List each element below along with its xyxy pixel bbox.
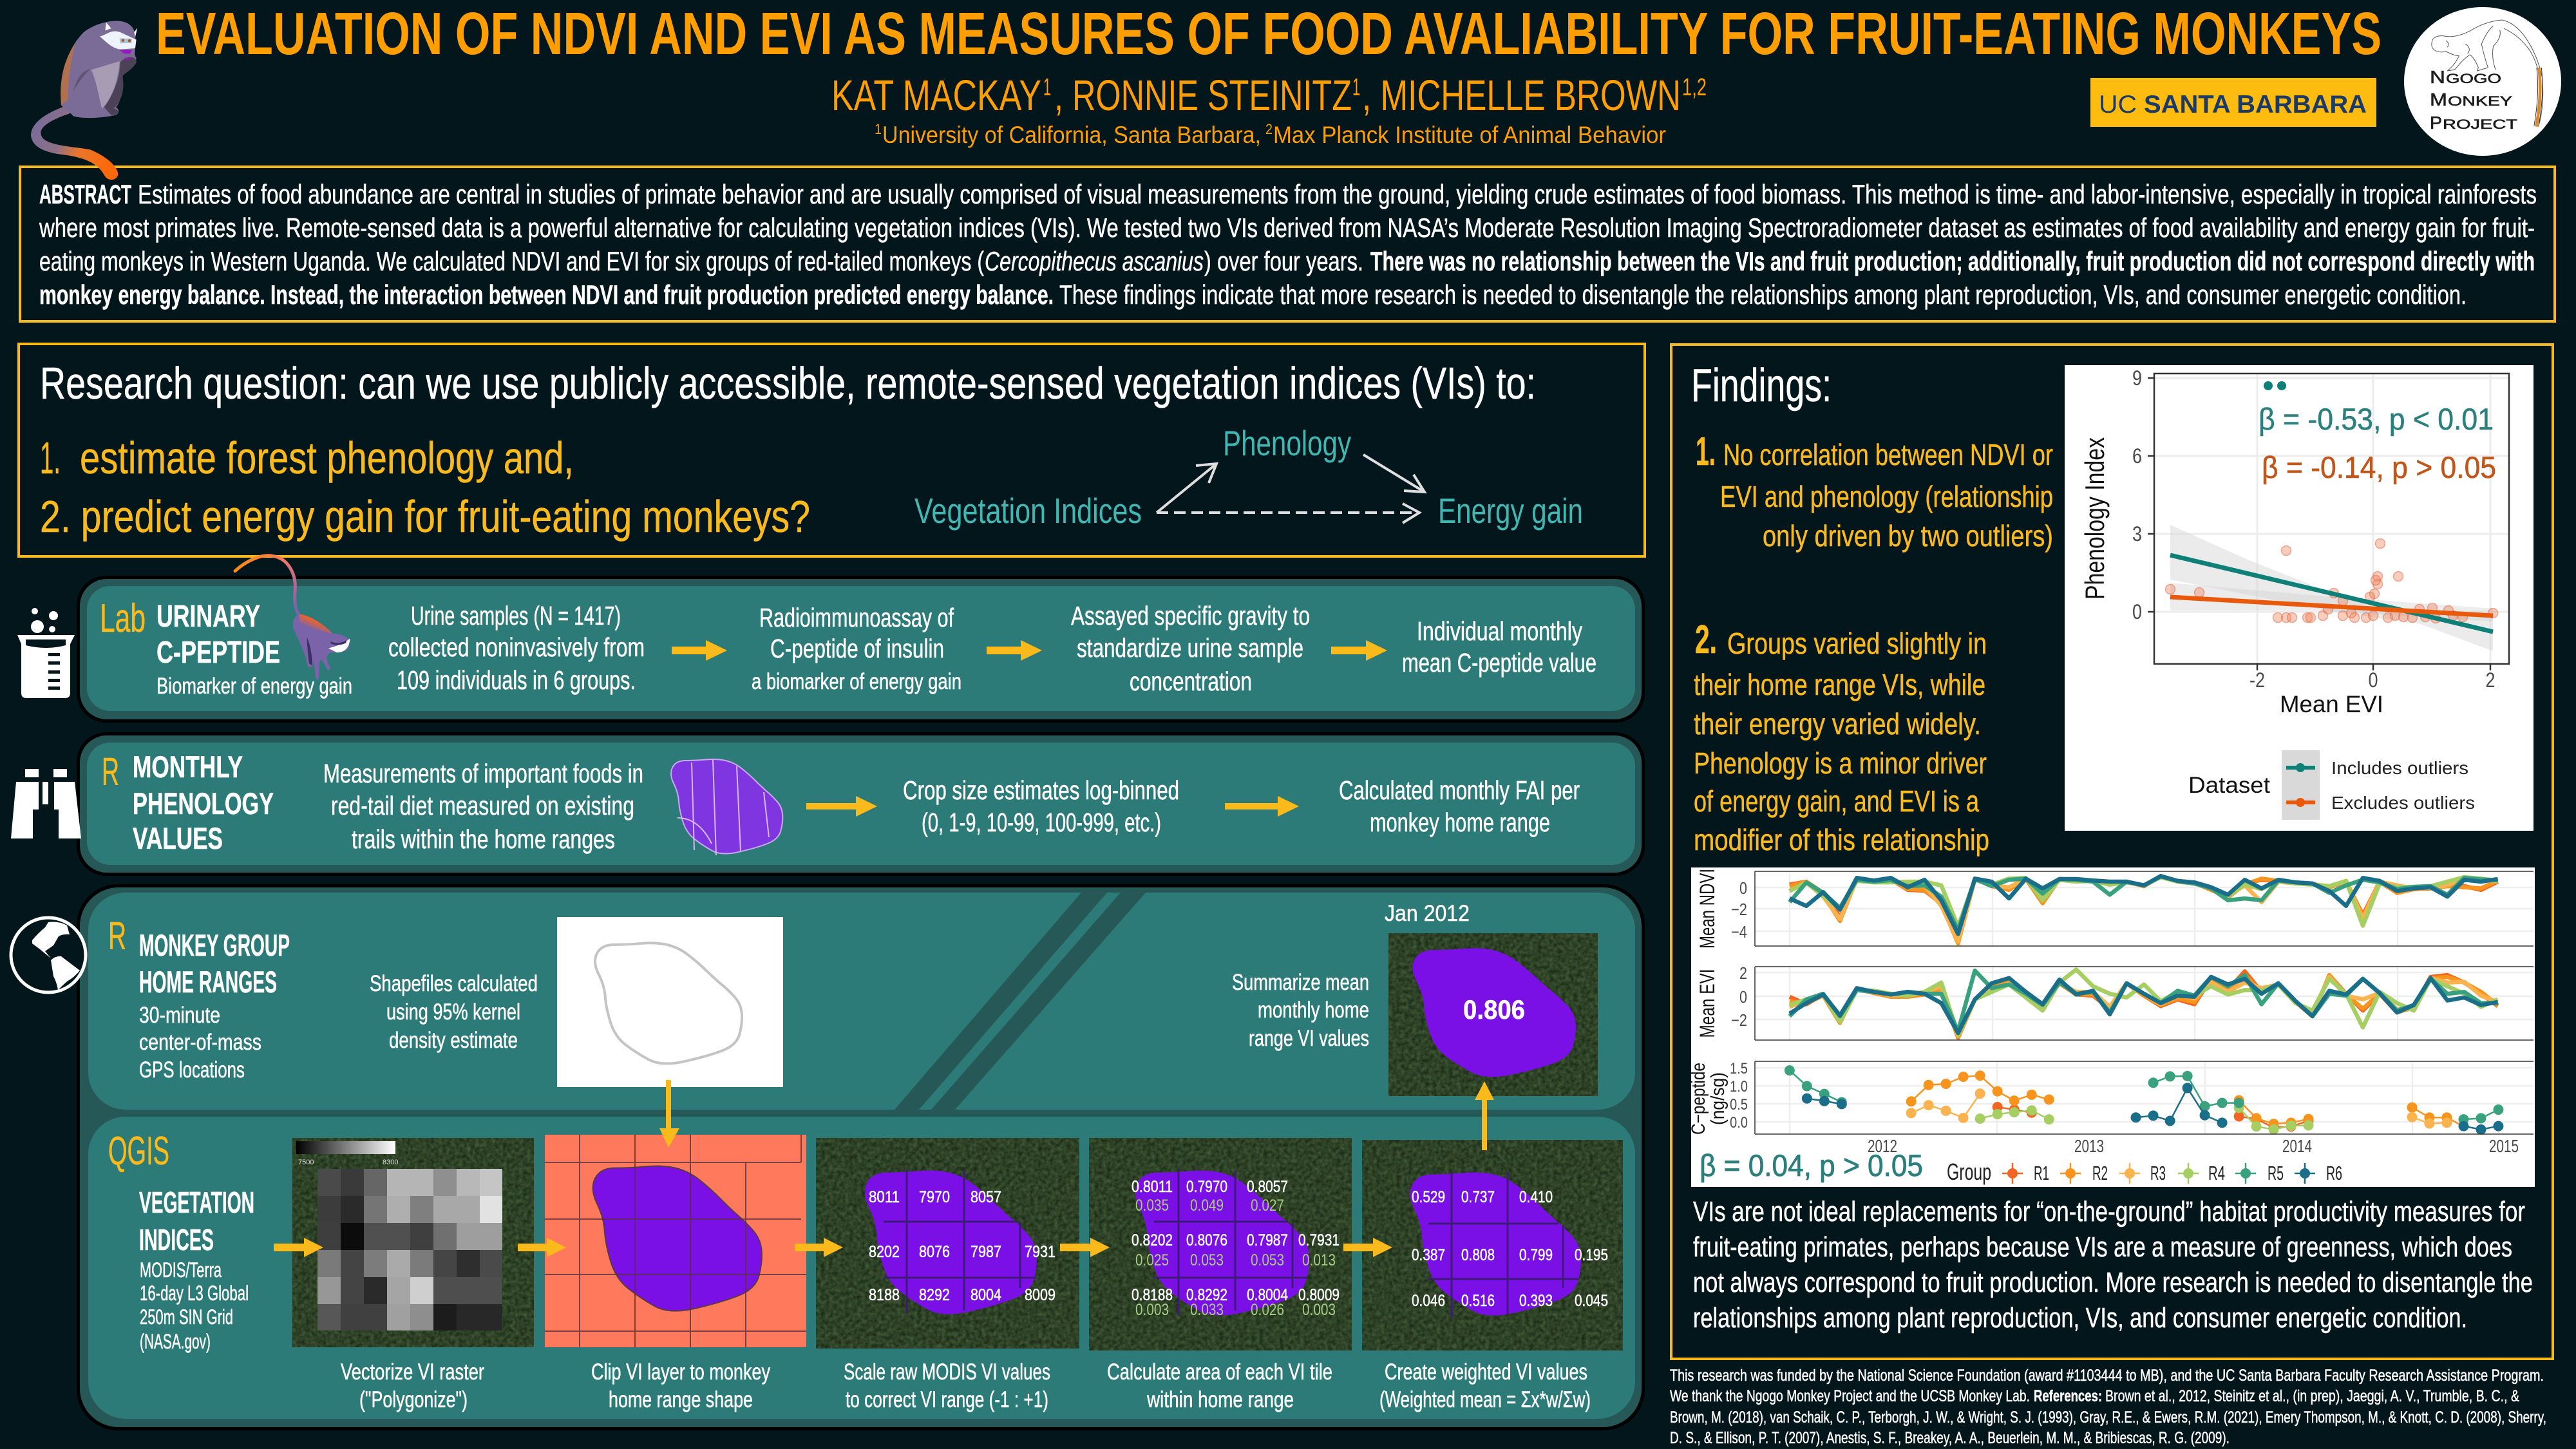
research aims: 1. [40, 433, 61, 483]
map: VI raster [292, 1138, 534, 1347]
map: tile areas: 0.027 [1251, 1197, 1284, 1215]
funding and references: References: [2034, 1387, 2102, 1405]
plot: C-peptide: 2013 [2074, 1136, 2104, 1156]
chart: phenology vs EVI scatter: Mean EVI [2280, 691, 2383, 717]
step: crop size [903, 775, 1179, 837]
heading: urinary C-peptide: Biomarker of energy gain [156, 674, 352, 699]
step: crop size: (0, 1-9, 10-99, 100-999, etc.) [922, 808, 1161, 837]
causal diagram [914, 423, 1583, 531]
logo: Ngogo Monkey Project [2404, 7, 2561, 156]
step: FAI [1339, 775, 1580, 837]
logo: Ngogo Monkey Project: N [2430, 67, 2445, 87]
map: tile areas: 0.8076 [1186, 1231, 1227, 1249]
logo: UC Santa Barbara: UC [2099, 91, 2137, 118]
map: trails in home range [671, 759, 782, 855]
heading: monkey group home ranges: center-of-mass [139, 1030, 261, 1055]
logo: UC Santa Barbara [2090, 78, 2376, 127]
captions: to correct VI range (-1 : +1) [846, 1387, 1048, 1412]
heading: monthly phenology values: VALUES [133, 821, 223, 855]
causal diagram: Phenology [1223, 423, 1351, 463]
heading: monthly phenology values: PHENOLOGY [133, 786, 274, 820]
map: weighted VI values: 0.799 [1519, 1246, 1553, 1264]
chart: phenology vs EVI scatter: 9 [2132, 366, 2142, 390]
heading: monthly phenology values: MONTHLY [133, 750, 243, 784]
arrow: into weighted [1343, 1238, 1392, 1257]
captions: Create weighted VI values [1385, 1359, 1587, 1385]
plot: mean EVI: Mean EVI [1696, 969, 1719, 1038]
step: urine samples [388, 601, 645, 695]
step: radioimmunoassay [752, 603, 961, 694]
label: QGIS: QGIS [108, 1129, 169, 1173]
finding 2 [1694, 618, 1989, 857]
arrow [806, 796, 877, 817]
heading: monkey group home ranges: MONKEY GROUP [139, 928, 290, 962]
map: scaled VI values: 7931 [1025, 1243, 1056, 1261]
map: scaled VI values: 8202 [869, 1243, 900, 1261]
map: scaled VI values: 8188 [869, 1286, 900, 1304]
map: tile areas: 0.7931 [1298, 1231, 1340, 1249]
authors: KAT MACKAY [831, 71, 1041, 120]
panel: research question [19, 344, 1645, 556]
plot: mean NDVI: Mean NDVI [1696, 869, 1719, 949]
abstract text: monkey energy balance. Instead, the interaction between NDVI and fruit production predicted energy balance. [39, 279, 1054, 310]
map: tile areas: 0.003 [1302, 1301, 1336, 1319]
plot: C-peptide: 0.0 [1730, 1114, 1748, 1132]
legend: groups: R3 [2150, 1162, 2166, 1184]
plot: mean NDVI: 0 [1739, 878, 1747, 898]
finding 1: only driven by two outliers) [1763, 519, 2053, 553]
map: weighted VI values: 0.045 [1575, 1292, 1608, 1310]
affiliations: University of California, Santa Barbara, [882, 122, 1261, 148]
chart: phenology vs EVI scatter [2065, 365, 2533, 831]
causal diagram: Vegetation Indices [914, 491, 1142, 531]
legend: groups: R5 [2268, 1162, 2284, 1184]
label: Lab: Lab [100, 596, 146, 641]
map: tile areas: 0.8188 [1132, 1286, 1173, 1304]
logo: UC Santa Barbara: SANTA BARBARA [2144, 91, 2367, 118]
plot: C-peptide: 2015 [2489, 1136, 2519, 1156]
plot: C-peptide [1688, 1060, 2533, 1156]
captions: (Weighted mean = Σx*w/Σw) [1379, 1387, 1591, 1412]
map: tile areas: 0.7970 [1186, 1178, 1227, 1196]
step: shapefiles: density estimate [389, 1028, 518, 1053]
plot: mean NDVI [1696, 869, 2533, 949]
step: monthly mean value: mean C-peptide value [1402, 648, 1596, 677]
map: weighted VI values: 0.737 [1461, 1188, 1495, 1206]
legend: groups: Group [1947, 1159, 1991, 1185]
finding 1: 1. [1696, 430, 1716, 474]
causal diagram: Energy gain [1438, 491, 1583, 531]
step: specific gravity: Assayed specific gravity to [1071, 601, 1310, 630]
logo: Ngogo Monkey Project: GOGO [2446, 71, 2501, 86]
map: tile areas: 0.026 [1251, 1301, 1284, 1319]
plot: mean EVI: −2 [1731, 1010, 1747, 1030]
step: monthly mean value: Individual monthly [1417, 616, 1582, 646]
legend: groups: R2 [2092, 1162, 2108, 1184]
captions: Clip VI layer to monkey [591, 1359, 770, 1385]
arrow: shapefile down to clip [659, 1080, 679, 1148]
chart: phenology vs EVI scatter: 0 [2132, 600, 2142, 623]
affiliations: 1 [875, 121, 882, 137]
map: tile areas: 0.033 [1190, 1301, 1224, 1319]
map: weighted VI values: 0.046 [1412, 1292, 1445, 1310]
statistic: C-peptide regression: β = 0.04, p > 0.05 [1700, 1148, 1923, 1182]
plot: mean EVI: 0 [1739, 987, 1747, 1007]
map: summary value: 0.806 [1463, 994, 1525, 1025]
step: shapefiles: Shapefiles calculated [370, 971, 538, 996]
step: summarize: monthly home [1258, 998, 1369, 1023]
logo: Ngogo Monkey Project: M [2430, 90, 2447, 109]
authors: 1 [1043, 74, 1051, 101]
heading: monkey group home ranges: 30-minute [139, 1003, 220, 1028]
finding 2: their home range VIs, while [1694, 668, 1985, 701]
step: urine samples: 109 individuals in 6 groups. [397, 665, 636, 695]
step: radioimmunoassay: a biomarker of energy gain [752, 669, 961, 694]
map: scaled VI values: 8004 [971, 1286, 1001, 1304]
step: food measurements: Measurements of important foods in [323, 759, 643, 788]
heading: urinary C-peptide: URINARY [156, 600, 260, 634]
abstract text: eating monkeys in Western Uganda. We calculated NDVI and EVI for six groups of red-tailed monkeys ( [39, 246, 984, 276]
map: scaled VI values: 7970 [919, 1188, 950, 1206]
map: tile areas: 0.8004 [1247, 1286, 1288, 1304]
map: weighted VI values: 0.808 [1461, 1246, 1495, 1264]
plot: mean NDVI: −2 [1731, 900, 1747, 919]
plot: mean NDVI: −4 [1731, 922, 1747, 942]
map: tile areas: 0.8011 [1132, 1178, 1173, 1196]
arrow: into raster [274, 1238, 323, 1257]
step: specific gravity: standardize urine sample [1077, 633, 1303, 663]
step: shapefiles: using 95% kernel [386, 999, 520, 1025]
captions [341, 1359, 1591, 1412]
funding and references [1670, 1367, 2546, 1447]
arrow: into scale [795, 1238, 843, 1257]
captions: within home range [1146, 1387, 1294, 1412]
map: summary value [1388, 933, 1598, 1096]
logo: Ngogo Monkey Project: ROJECT [2443, 117, 2517, 132]
legend: groups: R1 [2034, 1162, 2049, 1184]
arrow: into area [1060, 1238, 1110, 1257]
panel: lab urinary C-peptide [77, 576, 1645, 723]
heading: vegetation indices: 250m SIN Grid [140, 1305, 233, 1329]
sub-panel: R home ranges [88, 893, 1635, 1110]
map: home range outline [557, 917, 783, 1087]
map: scaled VI values [816, 1138, 1079, 1349]
research aims: 2. predict energy gain for fruit-eating monkeys? [40, 491, 810, 542]
heading: vegetation indices: MODIS/Terra [140, 1258, 222, 1282]
authors [831, 71, 1707, 120]
map: tile areas [1089, 1138, 1352, 1350]
map: tile areas: 0.003 [1135, 1301, 1169, 1319]
map: VI raster: 7500 [298, 1159, 314, 1166]
finding 2: of energy gain, and EVI is a [1694, 784, 1979, 818]
plot: C-peptide: C−peptide [1688, 1063, 1709, 1135]
abstract text: ABSTRACT [39, 179, 131, 209]
map: tile areas: 0.025 [1135, 1251, 1169, 1269]
finding 2: Phenology is a minor driver [1694, 746, 1987, 780]
step: food measurements: red-tail diet measured on existing [331, 791, 634, 820]
arrow [987, 640, 1042, 661]
step: crop size: Crop size estimates log-binned [903, 775, 1179, 805]
heading: vegetation indices: (NASA.gov) [140, 1330, 211, 1353]
label: R: R [102, 750, 119, 793]
chart: phenology vs EVI scatter: Includes outliers [2331, 758, 2468, 778]
step: urine samples: Urine samples (N = 1417) [411, 601, 621, 630]
finding 1 [1696, 430, 2053, 553]
plot: C-peptide: 1.0 [1730, 1078, 1748, 1095]
chart: phenology vs EVI scatter: 0 [2369, 668, 2378, 692]
step: summarize: range VI values [1249, 1026, 1369, 1051]
step: food measurements [323, 759, 643, 854]
abstract text: ) over four years. [1204, 246, 1363, 276]
step: specific gravity: concentration [1130, 667, 1252, 696]
chart: phenology vs EVI scatter: -2 [2249, 668, 2265, 692]
map: tile areas: 0.8292 [1186, 1286, 1227, 1304]
heading: monkey group home ranges: GPS locations [139, 1057, 245, 1083]
map: scaled VI values: 8076 [919, 1243, 950, 1261]
chart: phenology vs EVI scatter: 6 [2132, 444, 2142, 468]
map: tile areas: 0.7987 [1247, 1231, 1288, 1249]
icon: leaping monkey [235, 556, 350, 681]
arrow [1331, 640, 1387, 661]
affiliations: Max Planck Institute of Animal Behavior [1273, 122, 1666, 148]
captions: Calculate area of each VI tile [1107, 1359, 1332, 1385]
sub-panel: QGIS steps [88, 1080, 1635, 1419]
chart: phenology vs EVI scatter: 2 [2486, 668, 2495, 692]
plot: C-peptide: 0.5 [1730, 1096, 1748, 1113]
map: weighted VI values: 0.393 [1519, 1292, 1553, 1310]
arrow [672, 640, 727, 661]
plot: mean EVI: 2 [1739, 963, 1747, 983]
authors: 1 [1352, 74, 1360, 101]
chart: phenology vs EVI scatter: Dataset [2188, 773, 2270, 798]
chart: time series of NDVI, EVI and C-peptide [1688, 867, 2535, 1187]
captions: Vectorize VI raster [341, 1359, 484, 1385]
arrow [1225, 796, 1299, 817]
affiliations: 2 [1265, 121, 1273, 137]
research aims: estimate forest phenology and, [80, 433, 574, 483]
step: radioimmunoassay: Radioimmunoassay of [759, 603, 954, 632]
plot: mean EVI [1696, 963, 2533, 1040]
heading: urinary C-peptide: C-PEPTIDE [156, 636, 280, 670]
map: weighted VI values [1362, 1140, 1623, 1350]
map: VI raster: 8300 [383, 1159, 398, 1166]
legend: groups: R6 [2326, 1162, 2342, 1184]
map: tile areas: 0.053 [1190, 1251, 1224, 1269]
finding 2: modifier of this relationship [1694, 823, 1989, 857]
findings heading: Findings: [1691, 360, 1832, 412]
icon: binoculars [11, 769, 81, 838]
arrow: weighted up to summary [1475, 1081, 1494, 1150]
heading: vegetation indices: VEGETATION [139, 1186, 254, 1219]
map: scaled VI values: 8011 [869, 1188, 900, 1206]
heading: vegetation indices [139, 1186, 254, 1353]
heading: monthly phenology values [133, 750, 274, 855]
step: monthly mean value [1402, 616, 1596, 677]
map: scaled VI values: 8057 [971, 1188, 1001, 1206]
finding 2: their energy varied widely. [1694, 707, 1981, 741]
step: FAI: monkey home range [1370, 808, 1550, 837]
funding and references: We thank the Ngogo Monkey Project and the UCSB Monkey Lab. [1670, 1387, 2030, 1405]
map: scaled VI values: 7987 [971, 1243, 1001, 1261]
funding and references: D. S., & Ellison, P. T. (2007), Anestis, S. F., Breakey, A. A., Beuerlein, M. M., & Bribiescas, R. G. (2009). [1670, 1429, 2230, 1447]
chart: phenology vs EVI scatter: 3 [2132, 522, 2142, 545]
affiliations [875, 121, 1666, 148]
research question heading: Research question: can we use publicly accessible, remote-sensed vegetation indices (VIs) to: [40, 358, 1536, 408]
chart: phenology vs EVI scatter: β = -0.53, p < 0.01 [2259, 402, 2494, 436]
map: tile areas: 0.8202 [1132, 1231, 1173, 1249]
panel: remote sensing workflow [77, 884, 1645, 1430]
map: weighted VI values: 0.529 [1412, 1188, 1445, 1206]
step: urine samples: collected noninvasively from [388, 632, 645, 662]
map: scaled VI values: 8292 [919, 1286, 950, 1304]
finding 2: Groups varied slightly in [1727, 627, 1987, 660]
heading: vegetation indices: INDICES [139, 1223, 214, 1256]
heading: monkey group home ranges [139, 928, 290, 1083]
step: radioimmunoassay: C-peptide of insulin [770, 634, 944, 663]
heading: monkey group home ranges: HOME RANGES [139, 965, 277, 999]
step: specific gravity [1071, 601, 1310, 696]
authors: , RONNIE STEINITZ [1054, 71, 1352, 120]
map: weighted VI values: 0.410 [1519, 1188, 1553, 1206]
logo: Ngogo Monkey Project: ONKEY [2448, 94, 2512, 109]
authors: , MICHELLE BROWN [1362, 71, 1681, 120]
step: summarize [1232, 970, 1369, 1051]
step: summarize: Summarize mean [1232, 970, 1369, 995]
label: Jan 2012: Jan 2012 [1385, 901, 1470, 926]
icon: sitting monkey [31, 21, 137, 180]
step: food measurements: trails within the home ranges [352, 824, 615, 854]
authors: 1,2 [1682, 74, 1707, 101]
plot: C-peptide: (ng/sg) [1707, 1072, 1728, 1125]
map: clip layer [545, 1135, 806, 1347]
map: tile areas: 0.8057 [1247, 1178, 1288, 1196]
map: weighted VI values: 0.387 [1412, 1246, 1445, 1264]
plot: C-peptide: 1.5 [1730, 1060, 1748, 1077]
map: tile areas: 0.013 [1302, 1251, 1336, 1269]
plot: C-peptide: 2012 [1868, 1136, 1897, 1156]
map: tile areas: 0.053 [1251, 1251, 1284, 1269]
step: shapefiles [370, 971, 538, 1053]
captions: Scale raw MODIS VI values [844, 1359, 1050, 1385]
heading: vegetation indices: 16-day L3 Global [140, 1282, 249, 1305]
captions: home range shape [609, 1387, 753, 1412]
map: scaled VI values: 8009 [1025, 1286, 1056, 1304]
map: tile areas: 0.8009 [1298, 1286, 1340, 1304]
legend: groups [1947, 1159, 2342, 1185]
panel: monthly phenology values [77, 732, 1645, 876]
chart: phenology vs EVI scatter: β = -0.14, p > 0.05 [2262, 450, 2496, 484]
map: tile areas: 0.049 [1190, 1197, 1224, 1215]
step: FAI: Calculated monthly FAI per [1339, 775, 1580, 805]
finding 2: 2. [1695, 618, 1717, 662]
captions: ("Polygonize") [359, 1387, 468, 1412]
arrow: into clip [518, 1238, 566, 1257]
icon: lab beaker [17, 608, 75, 698]
panel: findings [1671, 345, 2553, 1359]
legend: groups: R4 [2208, 1162, 2225, 1184]
abstract text: Cercopithecus ascanius [985, 246, 1204, 276]
label: R: R [108, 914, 126, 958]
research aims [40, 433, 810, 542]
map: weighted VI values: 0.516 [1461, 1292, 1495, 1310]
map: weighted VI values: 0.195 [1575, 1246, 1608, 1264]
finding 1: No correlation between NDVI or [1723, 438, 2053, 471]
heading: urinary C-peptide [156, 600, 352, 699]
plot: C-peptide: 2014 [2282, 1136, 2312, 1156]
panel: abstract [20, 167, 2555, 321]
map: tile areas: 0.035 [1135, 1197, 1169, 1215]
finding 1: EVI and phenology (relationship [1720, 480, 2053, 513]
conclusion text [1693, 1196, 2533, 1334]
chart: phenology vs EVI scatter: Excludes outliers [2331, 793, 2475, 813]
chart: phenology vs EVI scatter: Phenology Index [2079, 437, 2110, 600]
abstract text [39, 179, 2537, 310]
icon: globe [11, 918, 86, 992]
logo: Ngogo Monkey Project: P [2430, 113, 2442, 133]
